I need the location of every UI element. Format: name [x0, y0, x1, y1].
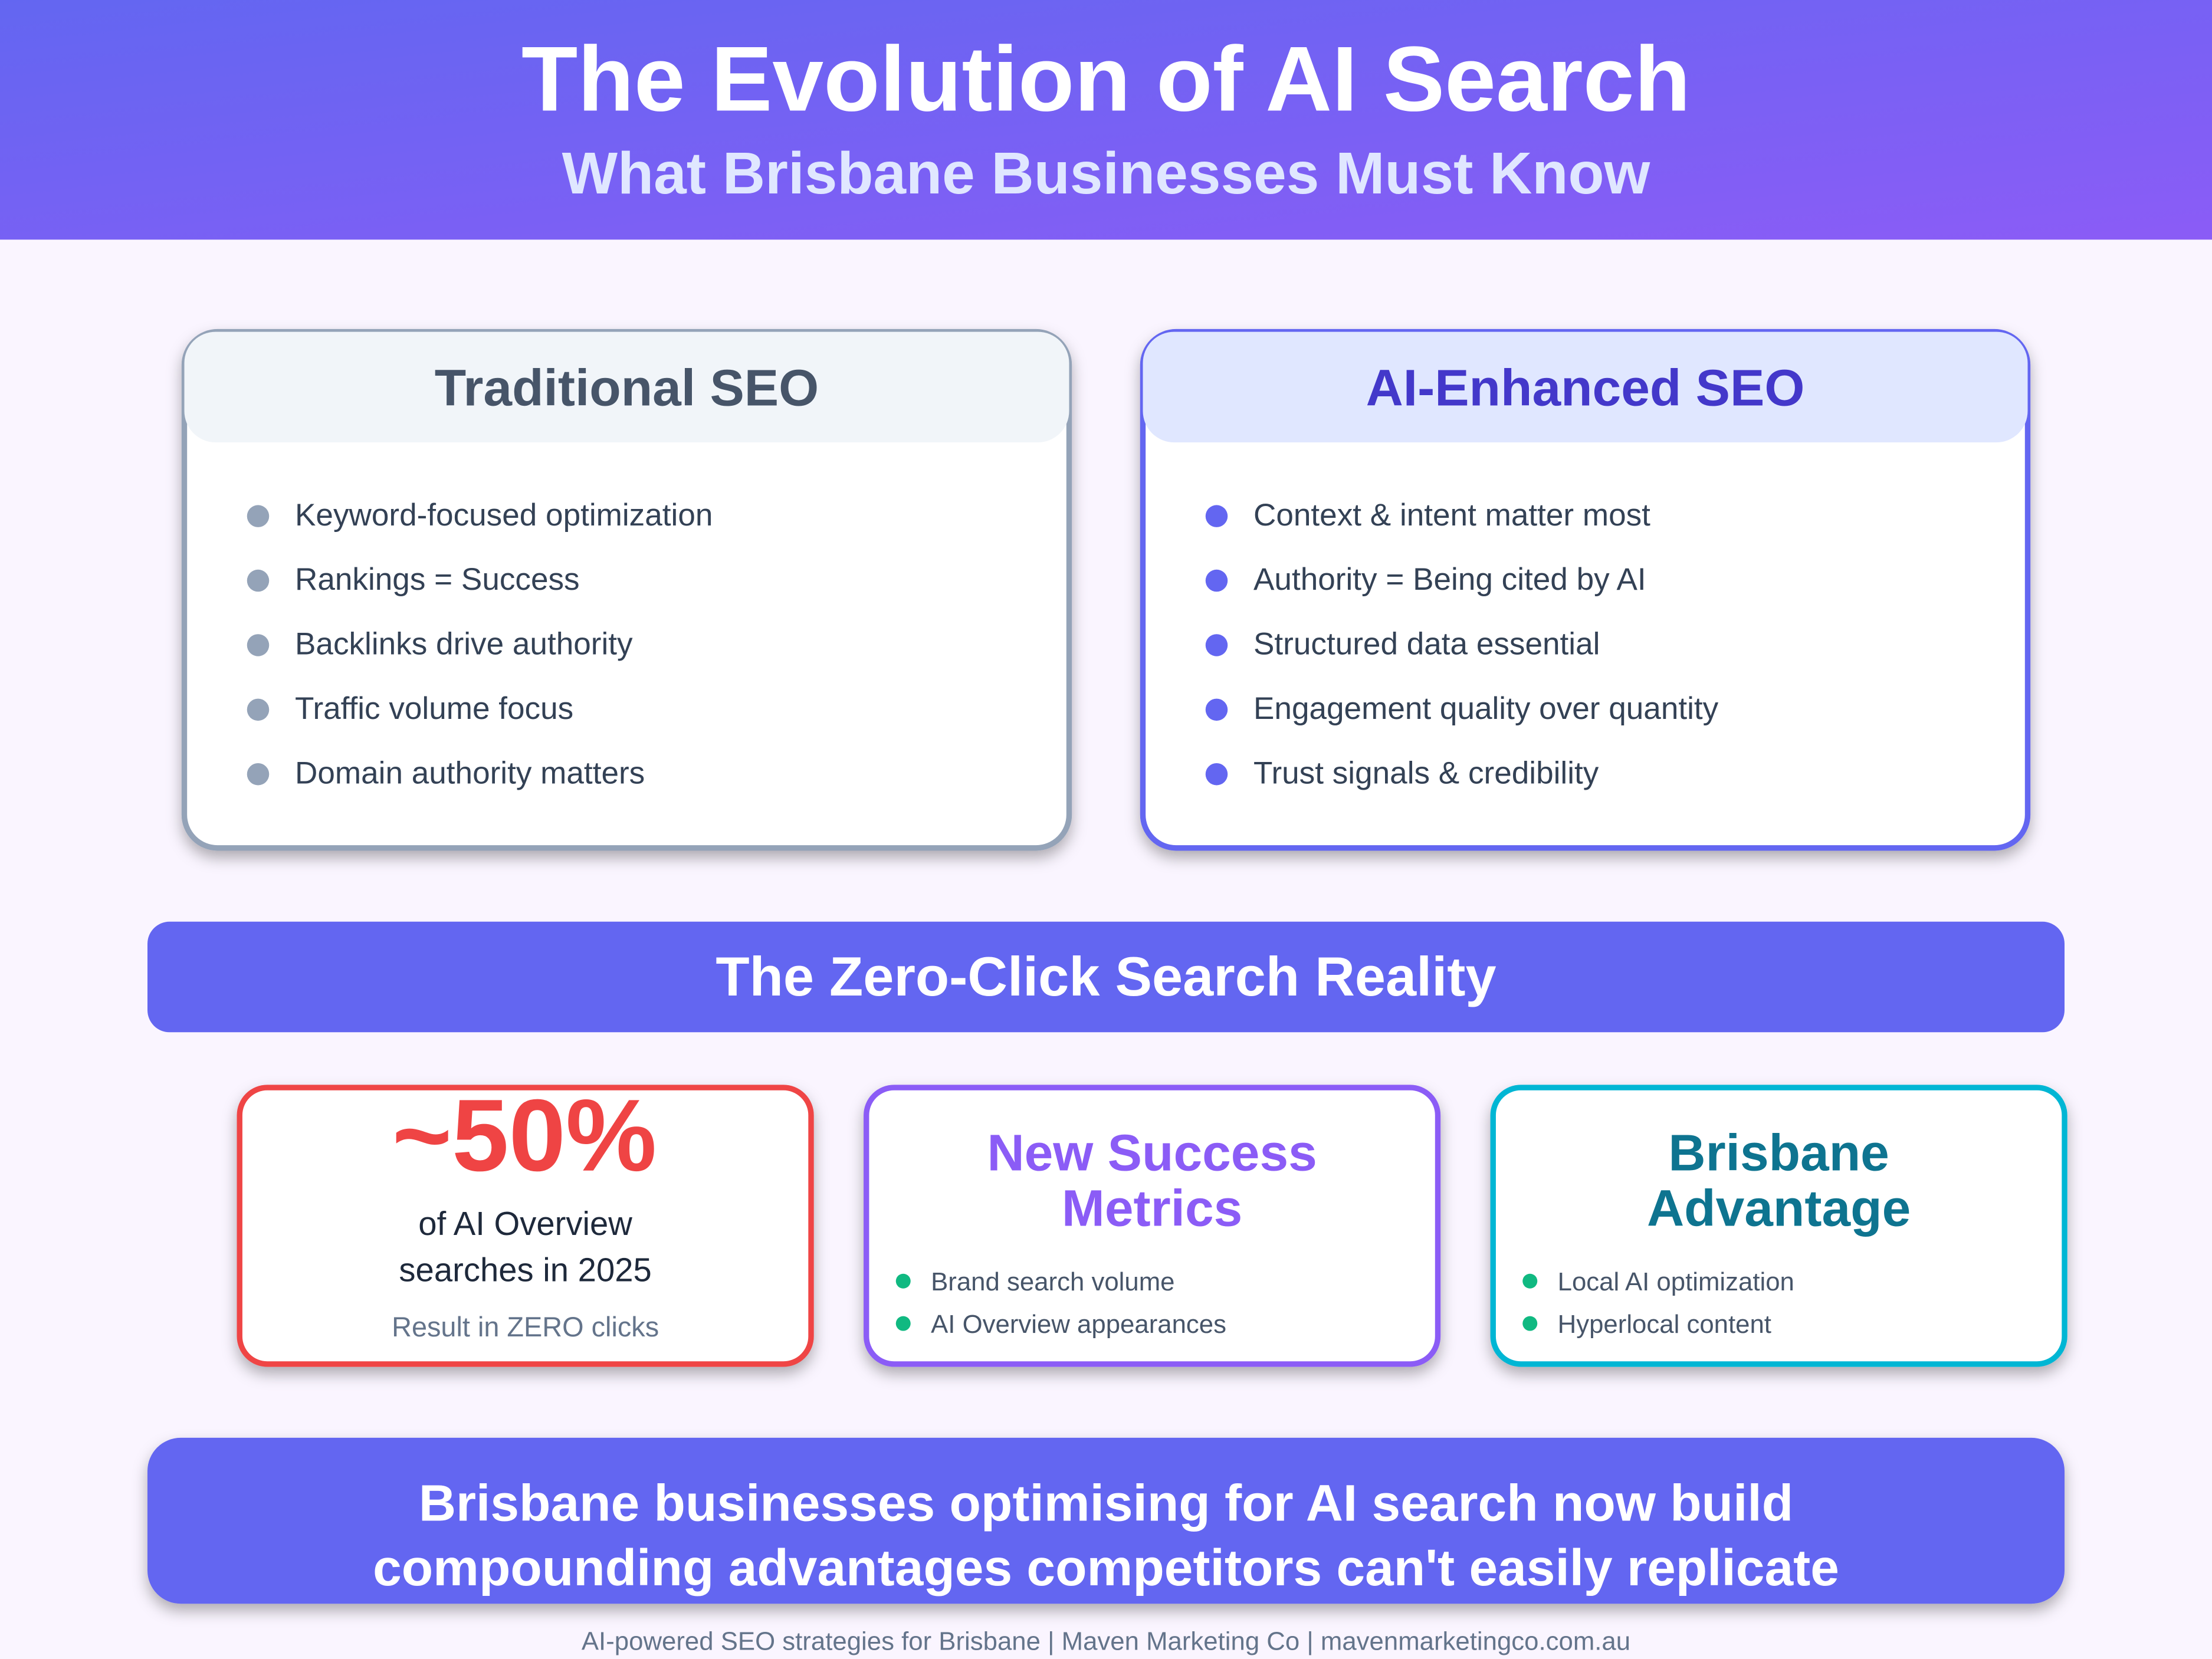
- list: traditional points: Rankings = Success: [295, 562, 580, 597]
- list: traditional points: Backlinks drive authority: [295, 627, 633, 662]
- metrics list: Brand search volume: [931, 1267, 1174, 1296]
- advantage list: Hyperlocal content: [1558, 1310, 1771, 1339]
- list: AI-enhanced points: Structured data essential: [1253, 627, 1600, 662]
- callout: conclusion: Brisbane businesses optimising for AI search now build: [419, 1474, 1793, 1532]
- panel heading: AI-Enhanced SEO: [1143, 332, 2028, 442]
- header banner: [0, 0, 2212, 239]
- list: traditional points: Keyword-focused optimization: [295, 498, 713, 533]
- metrics list: AI Overview appearances: [931, 1310, 1226, 1339]
- panel: AI-Enhanced SEO: [1143, 332, 2028, 848]
- callout: conclusion: [147, 1438, 2065, 1604]
- list: AI-enhanced points: Context & intent matter most: [1253, 498, 1650, 533]
- panel heading: Traditional SEO: [184, 332, 1069, 442]
- card title: Advantage: [1647, 1179, 1911, 1237]
- list: AI-enhanced points: Trust signals & credibility: [1253, 755, 1599, 790]
- section banner: zero-click: The Zero-Click Search Reality: [716, 945, 1496, 1007]
- list: AI-enhanced points: Authority = Being cited by AI: [1253, 562, 1646, 597]
- panel heading: AI-Enhanced SEO: AI-Enhanced SEO: [1366, 359, 1804, 417]
- card: new success metrics: [867, 1088, 1438, 1364]
- advantage list: [1522, 1267, 1794, 1339]
- card title: New Success: [987, 1124, 1317, 1182]
- advantage list: Local AI optimization: [1558, 1267, 1794, 1296]
- stat card: 50 percent: [239, 1078, 811, 1364]
- stat description: of AI Overview: [418, 1205, 632, 1242]
- metrics list: [896, 1267, 1226, 1339]
- panel heading: Traditional SEO: Traditional SEO: [435, 359, 819, 417]
- stat description: searches in 2025: [399, 1251, 652, 1288]
- list: traditional points: Traffic volume focus: [295, 691, 573, 726]
- list: AI-enhanced points: Engagement quality over quantity: [1253, 691, 1719, 726]
- title: The Evolution of AI Search: [521, 28, 1691, 131]
- footer: AI-powered SEO strategies for Brisbane | Maven Marketing Co | mavenmarketingco.com.au: [582, 1627, 1630, 1655]
- callout: conclusion: compounding advantages competitors can't easily replicate: [373, 1539, 1839, 1596]
- section banner: zero-click: [147, 922, 2065, 1032]
- list: AI-enhanced points: [1206, 498, 1719, 790]
- card title: Metrics: [1062, 1179, 1242, 1237]
- list: traditional points: [247, 498, 713, 790]
- card: Brisbane advantage: [1493, 1088, 2065, 1364]
- panel: Traditional SEO: [184, 332, 1069, 848]
- stat note: Result in ZERO clicks: [392, 1312, 659, 1342]
- big number: ~50%: [392, 1078, 657, 1192]
- list: traditional points: Domain authority matters: [295, 755, 645, 790]
- card title: Brisbane: [1668, 1124, 1889, 1182]
- subtitle: What Brisbane Businesses Must Know: [562, 140, 1650, 206]
